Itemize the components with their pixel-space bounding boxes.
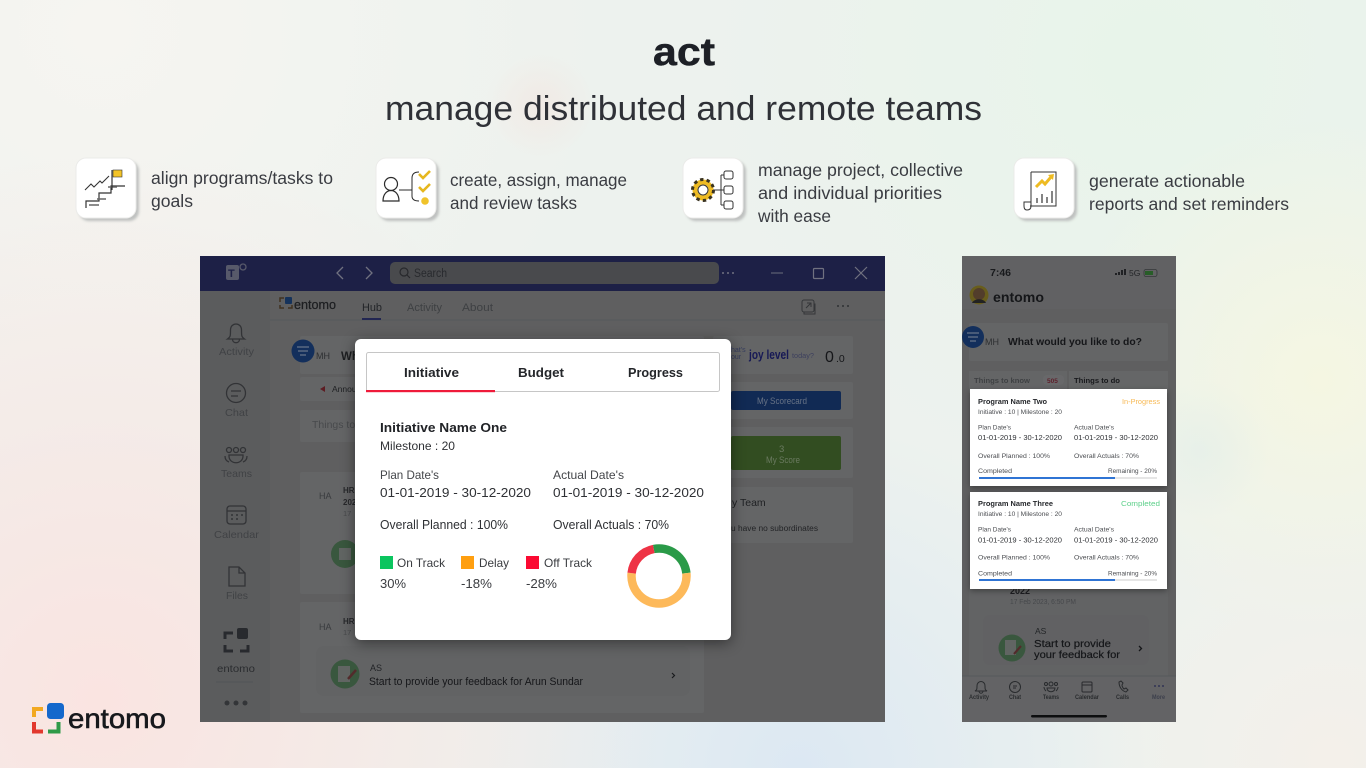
program card: Program Name Two: Overall Actuals : 70% xyxy=(1074,453,1139,460)
card text behind modal: HR xyxy=(343,617,355,626)
my team card: u have no subordinates xyxy=(731,524,818,533)
title: act xyxy=(653,31,715,74)
program card: Program Name Two: Plan Date's xyxy=(978,424,1012,432)
legend: -18% xyxy=(461,576,492,591)
program card: Program Name Three: 01-01-2019 - 30-12-2020 xyxy=(978,536,1062,544)
progress bar xyxy=(979,579,1157,581)
program card: Program Name Three: Actual Date's xyxy=(1074,526,1115,534)
program card: Program Name Two: 01-01-2019 - 30-12-2020 xyxy=(978,433,1062,442)
tabs xyxy=(366,352,720,392)
content cards xyxy=(300,336,853,713)
joy level widget: our xyxy=(731,354,742,361)
feature text xyxy=(151,168,333,211)
legend: 30% xyxy=(380,576,406,591)
joy level widget: .0 xyxy=(836,353,845,365)
my team card xyxy=(731,497,818,533)
phone feedback card: 2022 xyxy=(1010,586,1030,596)
tabs: Progress xyxy=(628,365,683,380)
app tab bar: Activity xyxy=(407,302,442,314)
joy level widget xyxy=(731,347,845,366)
program card: Program Name Three: Program Name Three xyxy=(978,499,1053,508)
feature text: and review tasks xyxy=(450,193,577,213)
progress bar xyxy=(979,477,1157,479)
initiative details: Initiative Name One xyxy=(380,420,507,435)
phone bottom nav: More xyxy=(1152,695,1166,701)
program card: Program Name Two: In-Progress xyxy=(1122,397,1160,406)
feature: align programs xyxy=(76,158,333,221)
program card: Program Name Three: Initiative : 10 | Milestone : 20 xyxy=(978,511,1062,518)
tabs: Budget xyxy=(518,365,565,380)
donut chart xyxy=(632,548,686,603)
left rail: entomo xyxy=(217,663,255,675)
brand logo: entomo xyxy=(68,703,166,734)
phone tabs: 505 xyxy=(1047,378,1058,385)
program card: Program Name Two: Remaining - 20% xyxy=(1108,468,1157,475)
title bar: T xyxy=(228,268,235,280)
phone prompt: What would you like to do? xyxy=(1008,336,1142,348)
tabs: Initiative xyxy=(404,365,459,380)
feature text: align programs/tasks to xyxy=(151,168,333,188)
phone bottom nav: Calendar xyxy=(1075,695,1100,701)
program card: Program Name Two: Actual Date's xyxy=(1074,424,1115,432)
feature text: reports and set reminders xyxy=(1089,194,1289,214)
card text behind modal: HR xyxy=(343,486,355,495)
program card: Program Name Two xyxy=(970,389,1167,486)
program card: Program Name Three: Overall Actuals : 70% xyxy=(1074,554,1139,562)
joy level widget: hat's xyxy=(731,347,746,354)
card text behind modal xyxy=(312,351,359,637)
initiative details xyxy=(380,420,704,532)
phone tabs: Things to know xyxy=(974,376,1030,385)
program card: Program Name Three: 01-01-2019 - 30-12-2020 xyxy=(1074,536,1158,544)
phone bottom nav: Activity xyxy=(969,695,990,701)
feedback row: Start to provide your feedback for Arun Sundar xyxy=(369,676,583,688)
phone tabs xyxy=(974,375,1120,385)
left rail: Files xyxy=(226,590,248,602)
program card: Program Name Two: Initiative : 10 | Milestone : 20 xyxy=(978,409,1062,416)
feature text: generate actionable xyxy=(1089,171,1245,191)
phone tabs: Things to do xyxy=(1074,376,1120,385)
card text behind modal: 17 xyxy=(343,509,351,518)
my scorecard button: My Scorecard xyxy=(757,396,807,406)
legend: Delay xyxy=(479,556,509,570)
status bar and header: 5G xyxy=(1129,268,1140,278)
card text behind modal: Wh xyxy=(341,351,359,363)
status bar and header: entomo xyxy=(993,290,1044,305)
legend: -28% xyxy=(526,576,557,591)
left rail xyxy=(200,291,270,722)
my score button xyxy=(731,436,841,470)
status bar and header xyxy=(962,256,1176,309)
legend: Off Track xyxy=(544,556,593,570)
phone feedback card: AS xyxy=(1035,626,1047,636)
program card: Program Name Three: Plan Date's xyxy=(978,526,1012,534)
initiative details: 01-01-2019 - 30-12-2020 xyxy=(380,485,531,500)
app tab bar xyxy=(270,297,885,320)
card text behind modal: HA xyxy=(319,622,332,632)
feature: manage priorities xyxy=(683,158,963,226)
phone cards background xyxy=(969,323,1168,676)
feature text: and individual priorities xyxy=(758,183,942,203)
program card: Program Name Three xyxy=(970,492,1167,589)
initiative details: Overall Planned : 100% xyxy=(380,518,508,532)
joy level widget: joy level xyxy=(748,348,789,362)
left rail: Teams xyxy=(221,468,252,480)
feature text xyxy=(1089,171,1289,214)
phone menu button xyxy=(962,326,984,348)
panel: initiative modal xyxy=(355,339,731,640)
phone bottom nav: Calls xyxy=(1116,695,1130,701)
panel: mobile app xyxy=(962,256,1176,722)
initiative details: 01-01-2019 - 30-12-2020 xyxy=(553,485,704,500)
phone bottom nav: Chat xyxy=(1009,695,1021,701)
program card: Program Name Three: Overall Planned : 100% xyxy=(978,554,1050,562)
feedback row: AS xyxy=(370,663,382,673)
icon: report with chart xyxy=(1014,158,1077,221)
feature text: create, assign, manage xyxy=(450,170,627,190)
app tab bar: entomo xyxy=(294,297,336,312)
title bar: Search xyxy=(414,268,447,280)
subtitle: manage distributed and remote teams xyxy=(385,90,982,128)
program card: Program Name Three: Completed xyxy=(978,570,1012,578)
left rail: Calendar xyxy=(214,529,260,541)
app tab bar: Hub xyxy=(362,302,382,314)
phone bottom nav xyxy=(962,676,1176,722)
joy level widget: 0 xyxy=(825,349,834,366)
program card: Program Name Two: Completed xyxy=(978,468,1012,475)
phone feedback card: your feedback for xyxy=(1034,650,1121,661)
program card: Program Name Two: Program Name Two xyxy=(978,397,1047,406)
app tab bar: About xyxy=(462,302,493,314)
my score button: My Score xyxy=(766,455,800,465)
card text behind modal: 202 xyxy=(343,498,357,507)
my team card: y Team xyxy=(732,497,766,509)
feature text xyxy=(450,170,627,213)
initiative details: Actual Date's xyxy=(553,468,624,482)
chat menu button xyxy=(292,340,314,362)
card text behind modal: 17 xyxy=(343,628,351,637)
phone feedback card: Start to provide xyxy=(1034,639,1111,650)
program card: Program Name Two: 01-01-2019 - 30-12-2020 xyxy=(1074,433,1158,442)
phone feedback card: 17 Feb 2023, 6:50 PM xyxy=(1010,599,1076,606)
icon: gear with hierarchy xyxy=(683,158,746,221)
feature: generate reports xyxy=(1014,158,1289,221)
feature: create assign tasks xyxy=(376,158,627,221)
initiative details: Milestone : 20 xyxy=(380,439,455,453)
feedback row xyxy=(316,646,690,696)
feature text xyxy=(757,160,963,226)
title bar xyxy=(200,256,885,291)
status bar and header: 7:46 xyxy=(990,267,1011,279)
icon: stairs with flag xyxy=(76,158,139,221)
feature text: with ease xyxy=(757,206,831,226)
program card: Program Name Two: Overall Planned : 100% xyxy=(978,453,1050,460)
legend xyxy=(380,556,593,591)
card text behind modal: HA xyxy=(319,491,332,501)
card text behind modal: MH xyxy=(316,351,330,361)
phone prompt: MH xyxy=(985,337,999,347)
joy level widget: today? xyxy=(792,351,814,360)
my score button: 3 xyxy=(779,444,784,455)
initiative details: Plan Date's xyxy=(380,468,439,482)
program card: Program Name Three: Remaining - 20% xyxy=(1108,570,1157,578)
feature text: manage project, collective xyxy=(758,160,963,180)
left rail: Chat xyxy=(225,407,248,419)
left rail: Activity xyxy=(219,346,255,358)
program card: Program Name Three: Completed xyxy=(1121,499,1160,508)
feature text: goals xyxy=(151,191,193,211)
phone bottom nav: Teams xyxy=(1043,695,1060,701)
panel: Teams desktop window xyxy=(200,256,885,722)
my scorecard button xyxy=(731,391,841,410)
phone feedback card xyxy=(983,586,1149,665)
icon: person with checklist xyxy=(376,158,439,221)
initiative details: Overall Actuals : 70% xyxy=(553,518,669,532)
legend: On Track xyxy=(397,556,446,570)
card text behind modal: Annou xyxy=(332,384,357,394)
card text behind modal: Things to xyxy=(312,419,355,431)
